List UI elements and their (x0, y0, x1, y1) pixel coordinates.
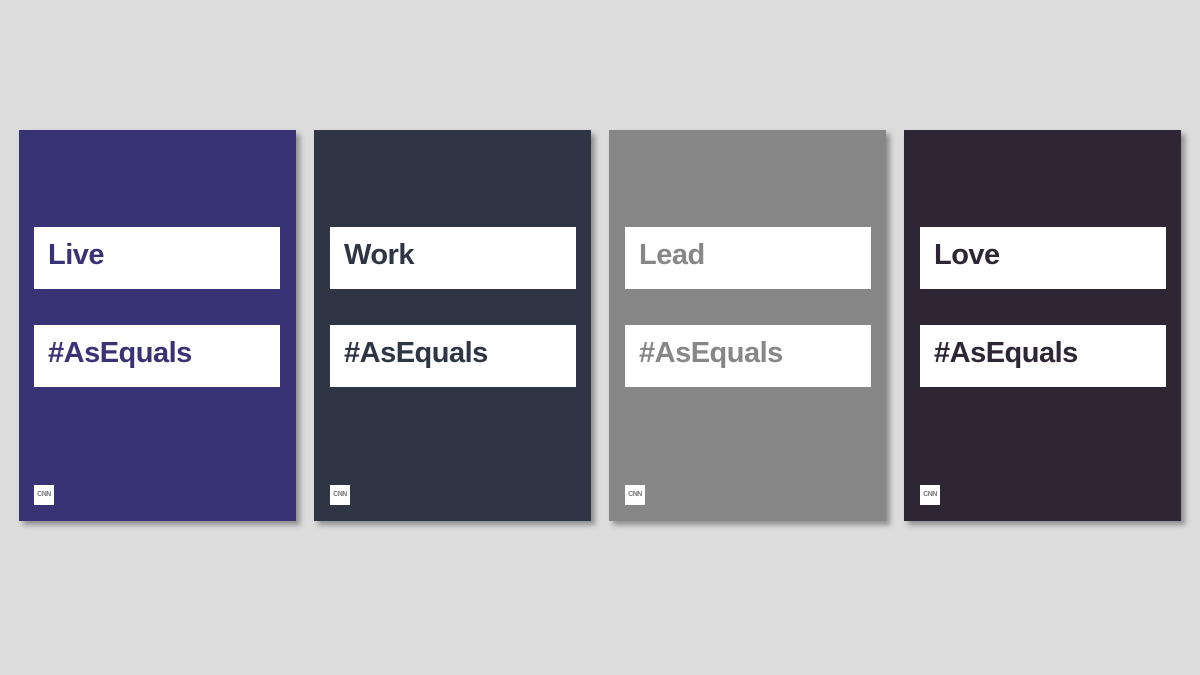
logo: CNN (920, 485, 940, 505)
box: Lead (625, 227, 871, 289)
box: Live (34, 227, 280, 289)
box: hashtag (34, 325, 280, 387)
box: Love (920, 227, 1166, 289)
logo: CNN: CNN (333, 491, 347, 498)
box: hashtag: #AsEquals (344, 337, 488, 369)
logo: CNN (34, 485, 54, 505)
card: Work (314, 130, 591, 521)
card: Live (19, 130, 296, 521)
box: hashtag (920, 325, 1166, 387)
box: hashtag: #AsEquals (48, 337, 192, 369)
box: Lead: Lead (639, 239, 705, 271)
box: hashtag (625, 325, 871, 387)
box: Love: Love (934, 239, 1000, 271)
box: Work: Work (344, 239, 414, 271)
card: Lead (609, 130, 886, 521)
logo: CNN (330, 485, 350, 505)
box: Work (330, 227, 576, 289)
box: Live: Live (48, 239, 104, 271)
card: Love (904, 130, 1181, 521)
logo: CNN (625, 485, 645, 505)
logo: CNN: CNN (628, 491, 642, 498)
logo: CNN: CNN (923, 491, 937, 498)
box: hashtag (330, 325, 576, 387)
box: hashtag: #AsEquals (934, 337, 1078, 369)
box: hashtag: #AsEquals (639, 337, 783, 369)
logo: CNN: CNN (37, 491, 51, 498)
